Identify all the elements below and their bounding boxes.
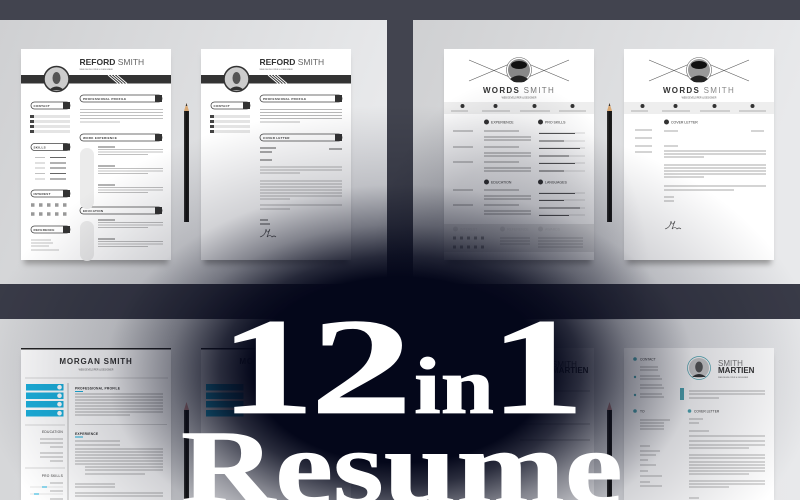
cover letter page: Smith Martien — [624, 348, 774, 500]
resume page: Morgan Smith — [21, 348, 171, 500]
resume page: Words Smith: PRO SKILLS — [545, 120, 566, 124]
resume page: Smith Martien — [444, 348, 594, 500]
icon: pencil — [184, 103, 189, 222]
cover letter page: Reford Smith: PROFESSIONAL PROFILE — [263, 97, 306, 101]
resume page: Words Smith — [444, 49, 594, 260]
resume page: Words Smith: WEB DEVELOPER & DESIGNER — [502, 98, 537, 100]
resume page: Words Smith: EXPERIENCE — [491, 120, 514, 124]
section headings — [31, 95, 162, 233]
cover letter page: Smith Martien: MARTIEN — [718, 366, 755, 375]
resume page: Words Smith: EDUCATION — [491, 180, 512, 184]
title line: 12 in 1 — [220, 290, 585, 443]
resume page: Morgan Smith alternate — [201, 348, 351, 500]
title line: 12 in 1: in — [414, 342, 494, 431]
resume page: Morgan Smith: MORGAN SMITH — [59, 357, 133, 366]
cover letter page: Smith Martien: TO — [640, 410, 645, 414]
cover letter page: Reford Smith: COVER LETTER — [263, 136, 290, 140]
panel: top left mockup — [0, 20, 387, 284]
portrait — [44, 66, 69, 92]
cover letter page: Reford Smith: REFORD SMITH — [260, 57, 324, 67]
cover letter page: Smith Martien: CONTACT — [640, 358, 656, 362]
cover letter page: Reford Smith: CONTACT — [214, 104, 230, 108]
secondary shading on right pair — [370, 80, 650, 320]
resume page: Words Smith: LANGUAGES — [545, 180, 567, 184]
cover letter page: Words Smith: WORDS SMITH — [663, 86, 735, 95]
resume page: Morgan Smith: WEB DEVELOPER & DESIGNER — [79, 370, 114, 372]
resume page: Morgan Smith alternate: MORGAN SMITH — [239, 357, 313, 366]
panel: top right mockup — [413, 20, 800, 284]
resume page: Reford Smith: WEB DEVELOPER & DESIGNER — [80, 69, 113, 71]
interest icons — [31, 205, 70, 214]
title line: 12 in 1: 1 — [490, 290, 585, 443]
title line: 12 in 1: 1 — [220, 290, 315, 443]
panel: bottom mockup — [0, 319, 800, 500]
resume page: Morgan Smith: EDUCATION — [42, 430, 63, 434]
resume page: Reford Smith: INTEREST — [34, 192, 51, 196]
body text lines — [31, 110, 163, 250]
cover letter page: Words Smith — [624, 49, 774, 260]
portrait — [688, 356, 710, 380]
resume page: Words Smith: REFERENCE — [507, 228, 529, 232]
lower band shading — [0, 284, 800, 319]
resume page: Reford Smith: CONTACT — [34, 104, 50, 108]
resume page: Morgan Smith: PRO SKILLS — [42, 474, 64, 478]
resume page: Words Smith: INTEREST — [460, 228, 478, 232]
signature — [260, 229, 276, 237]
icon: pencil — [607, 402, 612, 500]
resume page: Words Smith: WORDS SMITH — [483, 86, 555, 95]
resume page: Reford Smith — [21, 49, 171, 261]
cover letter page: Reford Smith: WEB DEVELOPER & DESIGNER — [260, 69, 293, 71]
resume page: Reford Smith: SKILLS — [34, 145, 46, 149]
resume page: Words Smith: AWARDS — [545, 228, 561, 232]
cover letter page: Smith Martien: WEB DEVELOPER & DESIGNER — [718, 377, 749, 379]
cover letter page: Reford Smith — [201, 49, 351, 260]
resume page: Smith Martien: MARTIEN — [552, 366, 589, 375]
cover letter page: Words Smith: WEB DEVELOPER & DESIGNER — [682, 98, 717, 100]
title line: 12 in 1: 2 — [310, 290, 413, 443]
resume page: Reford Smith: PROFESSIONAL PROFILE — [83, 97, 126, 101]
resume page: Reford Smith: WORK EXPERIENCE — [83, 136, 117, 140]
resume page: Morgan Smith: EXPERIENCE — [75, 432, 99, 436]
resume page: Reford Smith: EDUCATION — [83, 209, 103, 213]
resume page: Smith Martien: SMITH — [552, 360, 577, 369]
date pills — [80, 148, 94, 209]
signature — [665, 221, 681, 229]
title: 12 in 1 Resume — [181, 290, 623, 500]
cover letter page: Smith Martien: COVER LETTER — [694, 410, 720, 414]
resume page: Morgan Smith: PROFESSIONAL PROFILE — [75, 386, 121, 390]
icon: pencil — [607, 103, 612, 222]
resume page: Reford Smith: REFERENCE — [34, 228, 55, 232]
icon: pencil — [184, 402, 189, 500]
name: SMITH — [718, 359, 743, 368]
name: REFORD SMITH — [80, 57, 144, 67]
cover letter page: Words Smith: COVER LETTER — [671, 120, 698, 124]
